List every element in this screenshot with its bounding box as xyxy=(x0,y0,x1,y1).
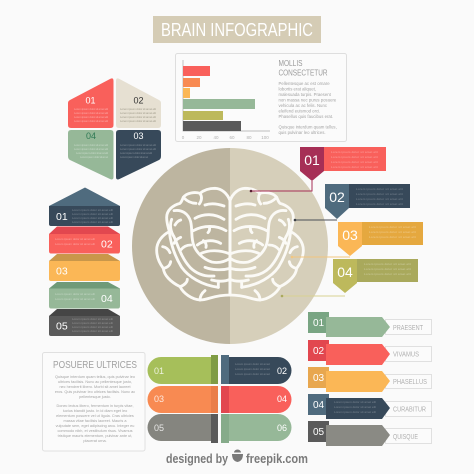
bar chart: 40 xyxy=(213,135,219,140)
arrow item 04 xyxy=(308,394,432,419)
hexagon cell 04: Lorem ipsum dolor sit amet xyxy=(80,155,108,159)
tab 03: 03 xyxy=(154,394,164,404)
stack item 05 xyxy=(49,309,120,336)
chart body text: Quisque interdum quam tellus, xyxy=(278,124,337,130)
arrow item 02: VIVAMUS xyxy=(393,352,419,358)
flag 04 xyxy=(333,259,418,293)
icon: brain xyxy=(157,188,303,300)
arrow item 04: Lorem ipsum dolor sit amet elit xyxy=(334,410,376,414)
connector 02 xyxy=(294,219,337,221)
arrow item 02: 02 xyxy=(313,346,324,357)
connector 03 xyxy=(291,256,350,258)
chart body text: malesuada turpis. Praesent xyxy=(278,92,332,97)
arrow item 05: QUISQUE xyxy=(393,434,418,441)
stack item 05: Lorem ipsum dolor sit amet elit xyxy=(72,317,113,321)
arrow item 04: CURABITUR xyxy=(393,406,426,414)
flag 03: Lorem ipsum dolor sit amet elit xyxy=(369,230,416,234)
arrow item 04: Lorem ipsum dolor sit amet elit xyxy=(334,400,376,404)
hexagon cell 02: 02 xyxy=(133,96,144,106)
stack item 01: Lorem ipsum dolor sit amet elit xyxy=(72,212,113,216)
arrow item 03: 03 xyxy=(313,373,324,384)
hexagon cell 04 xyxy=(68,130,114,179)
hexagon cell 02: Lorem ipsum dolor sit amet elit xyxy=(120,119,156,123)
panel body text: nec hendrerit libero. Morbi sit amet laoreet xyxy=(59,385,132,389)
flag 02: Lorem ipsum dolor sit amet elit xyxy=(356,192,403,196)
arrow item 01: 01 xyxy=(313,318,324,329)
stack item 01: Lorem ipsum dolor sit amet elit xyxy=(72,220,113,224)
hexagon infographic xyxy=(68,78,161,179)
arrow item 04: 04 xyxy=(313,400,324,411)
chart body text: quis pulvinar leo ultrices. xyxy=(278,130,326,135)
hexagon cell 02: Lorem ipsum dolor sit amet elit xyxy=(120,111,156,115)
chart heading: CONSECTETUR xyxy=(278,68,328,78)
watermark: designed by freepik: designed by xyxy=(166,451,229,466)
flag 02: Lorem ipsum dolor sit amet elit xyxy=(356,197,403,201)
flag 04: Lorem ipsum dolor sit amet elit xyxy=(364,272,411,276)
flag 01: Lorem ipsum dolor sit amet elit xyxy=(331,165,378,169)
stacked arrow list xyxy=(49,188,120,336)
bar chart: 0 xyxy=(182,135,185,140)
hexagon cell 02 xyxy=(116,78,161,128)
watermark: designed by freepik: freepik.com xyxy=(246,451,308,466)
stack item 04: 04 xyxy=(101,293,113,305)
tab 02 xyxy=(221,355,292,384)
stack item 05: Lorem ipsum dolor sit amet elit xyxy=(72,321,113,325)
stack item 02 xyxy=(49,226,120,254)
panel body text: Donec lectus libero, fermentum in turpis vitae, xyxy=(56,404,134,408)
arrow item 03: PHASELLUS xyxy=(393,379,427,386)
chart body text: Phasellus quis faucibus erat. xyxy=(278,114,333,119)
flag 02 xyxy=(325,184,410,219)
panel body text: ultrices facilisis. Nunc ac pellentesque justo, xyxy=(58,380,132,384)
arrow item 01: PRAESENT xyxy=(393,325,424,332)
bar chart: 20 xyxy=(196,135,202,140)
tab 02: Lorem ipsum dolor sit amet xyxy=(235,362,270,366)
hexagon cell 03: Lorem ipsum dolor sit amet elit xyxy=(120,147,156,151)
tab 06: 06 xyxy=(277,423,287,433)
hexagon cell 01 xyxy=(68,78,114,128)
tab 02: Lorem ipsum dolor sit amet xyxy=(235,367,270,371)
chart body text xyxy=(278,81,337,135)
flag 01: Lorem ipsum dolor sit amet elit xyxy=(331,155,378,159)
hexagon cell 04: Lorem ipsum dolor sit amet elit xyxy=(74,147,108,151)
tab 05: 05 xyxy=(154,423,164,433)
stack item 04 xyxy=(49,282,120,308)
panel body text: Quisque interdum quam tellus, quis pulvinar leo xyxy=(55,375,135,379)
flag 03: Lorem ipsum dolor sit amet elit xyxy=(369,235,416,239)
panel body text: commodo nibh, et vestibulum risus. Vivamus xyxy=(57,429,133,433)
arrow item 01 xyxy=(308,312,432,337)
hexagon cell 01: Lorem ipsum dolor sit amet elit xyxy=(74,115,108,119)
connector 04 xyxy=(281,295,345,297)
stack item 05: Lorem ipsum dolor sit amet elit xyxy=(72,329,113,333)
stack item 02: 02 xyxy=(101,238,113,250)
panel heading: POSUERE ULTRICES xyxy=(53,359,137,371)
hexagon cell 04: 04 xyxy=(86,131,96,141)
stack item 05: Lorem ipsum dolor sit amet elit xyxy=(72,325,113,329)
tab 04 xyxy=(221,386,292,413)
hexagon cell 02: Lorem ipsum dolor sit amet elit xyxy=(120,115,156,119)
arrow item 02 xyxy=(308,340,432,365)
flag 02: 02 xyxy=(329,189,345,205)
panel body text: massa vitae facilisis laoreet. Mauris a xyxy=(64,419,127,423)
chart body text: non massa nec purus posuere xyxy=(278,98,337,102)
flag 01 xyxy=(300,147,386,181)
chart body text: vehicula ac ac felis. Nunc xyxy=(278,103,328,108)
connector 01 xyxy=(250,181,312,192)
arrow item 03 xyxy=(308,367,432,392)
watermark: designed by freepik xyxy=(166,450,308,466)
stack item 01 xyxy=(49,188,120,226)
panel body text: eros. Quis pulvinar leo ultrices facilisis. Nunc ac xyxy=(55,390,135,394)
panel body text: vulputate sem, eget adipiscing arcu. Integer eu xyxy=(56,424,134,428)
flag 01: Lorem ipsum dolor sit amet elit xyxy=(331,150,378,154)
tab 06 xyxy=(221,414,292,443)
hexagon cell 04: Lorem ipsum dolor sit amet elit xyxy=(76,151,108,155)
hexagon cell 01: Lorem ipsum dolor sit amet elit xyxy=(74,107,108,111)
hexagon cell 03: Lorem ipsum dolor sit amet elit xyxy=(120,143,156,147)
tab 02: 02 xyxy=(277,366,287,376)
stack item 01: Lorem ipsum dolor sit amet elit xyxy=(72,216,113,220)
stack item 04: Lorem ipsum dolor sit amet elit xyxy=(55,292,95,296)
title: BRAIN INFOGRAPHIC xyxy=(161,19,313,40)
hexagon cell 04: Lorem ipsum dolor sit amet elit xyxy=(74,143,108,147)
panel body text: luctus blandit justo. In id diam eget leo xyxy=(63,409,127,413)
title xyxy=(153,16,321,43)
chart body text: lobortis erat aliquet, xyxy=(278,86,316,92)
connector lines xyxy=(250,181,350,297)
stack item 02: Lorem ipsum dolor sit amet elit xyxy=(55,237,95,241)
tab 02: Lorem ipsum dolor sit amet xyxy=(235,372,270,376)
flag 03: Lorem ipsum dolor sit amet elit xyxy=(369,225,416,229)
flag 04: Lorem ipsum dolor sit amet elit xyxy=(364,262,411,266)
stack item 02: Lorem ipsum dolor sit amet elit xyxy=(55,242,95,246)
hexagon cell 03: Lorem ipsum dolor sit amet elit xyxy=(120,151,152,155)
stack item 05: 05 xyxy=(56,320,68,332)
flag 02: Lorem ipsum dolor sit amet elit xyxy=(356,187,403,191)
tab 03 xyxy=(148,386,218,413)
panel body text: tristique mauris elementum, pulvinar ante ut, xyxy=(58,434,132,438)
chart heading xyxy=(278,59,328,78)
tab 04: 04 xyxy=(277,394,287,404)
chart body text: eleifend euismod orci. xyxy=(278,108,320,114)
stack item 03 xyxy=(49,254,120,281)
stack item 04: Lorem ipsum dolor sit amet elit xyxy=(55,297,95,301)
stack item 01: Lorem ipsum dolor sit amet elit xyxy=(72,208,113,212)
flag 03: 03 xyxy=(342,227,358,243)
flag 04: 04 xyxy=(337,264,353,280)
tab 01 xyxy=(148,355,218,384)
flag 01: Lorem ipsum dolor sit amet elit xyxy=(331,160,378,164)
right arrow list xyxy=(308,312,432,446)
flag 03 xyxy=(338,222,423,256)
chart heading: MOLLIS xyxy=(278,59,302,68)
hexagon cell 01: 01 xyxy=(85,96,96,106)
tab 05 xyxy=(148,414,218,443)
hexagon cell 01: Lorem ipsum dolor sit amet elit xyxy=(74,119,108,123)
flag 02: Lorem ipsum dolor sit amet elit xyxy=(356,202,403,206)
panel body text: elementum posuere vel ut ligula. Cras ultricies xyxy=(56,414,134,418)
bar chart xyxy=(182,60,270,140)
bar chart: 60 xyxy=(229,135,235,140)
panel body text: placerat urna. xyxy=(83,439,107,443)
rounded tab grid xyxy=(148,355,292,443)
bar chart: 100 xyxy=(261,135,269,140)
chart body text: Pellentesque ac est ornare xyxy=(278,81,330,86)
panel body text xyxy=(55,375,135,443)
stack item 03: 03 xyxy=(56,266,68,278)
bar chart: 80 xyxy=(246,135,252,140)
panel body text: pellentesque justo. xyxy=(79,395,111,399)
panel: bar chart and text xyxy=(176,54,346,142)
arrow item 05: 05 xyxy=(313,427,324,438)
hexagon cell 03: Lorem ipsum dolor sit amet xyxy=(120,155,148,159)
central circle xyxy=(132,148,328,344)
arrow item 04: Lorem ipsum dolor sit amet elit xyxy=(334,405,376,409)
arrow item 05 xyxy=(308,421,432,446)
hexagon cell 02: Lorem ipsum dolor sit amet elit xyxy=(120,107,156,111)
flag 01: 01 xyxy=(304,152,320,168)
hexagon cell 03: 03 xyxy=(133,131,144,141)
panel: posuere ultrices xyxy=(42,352,145,451)
hexagon cell 01: Lorem ipsum dolor sit amet elit xyxy=(74,111,108,115)
hexagon cell 03 xyxy=(116,130,161,179)
flag 04: Lorem ipsum dolor sit amet elit xyxy=(364,267,411,271)
stack item 01: 01 xyxy=(56,211,68,223)
tab 01: 01 xyxy=(154,366,164,376)
